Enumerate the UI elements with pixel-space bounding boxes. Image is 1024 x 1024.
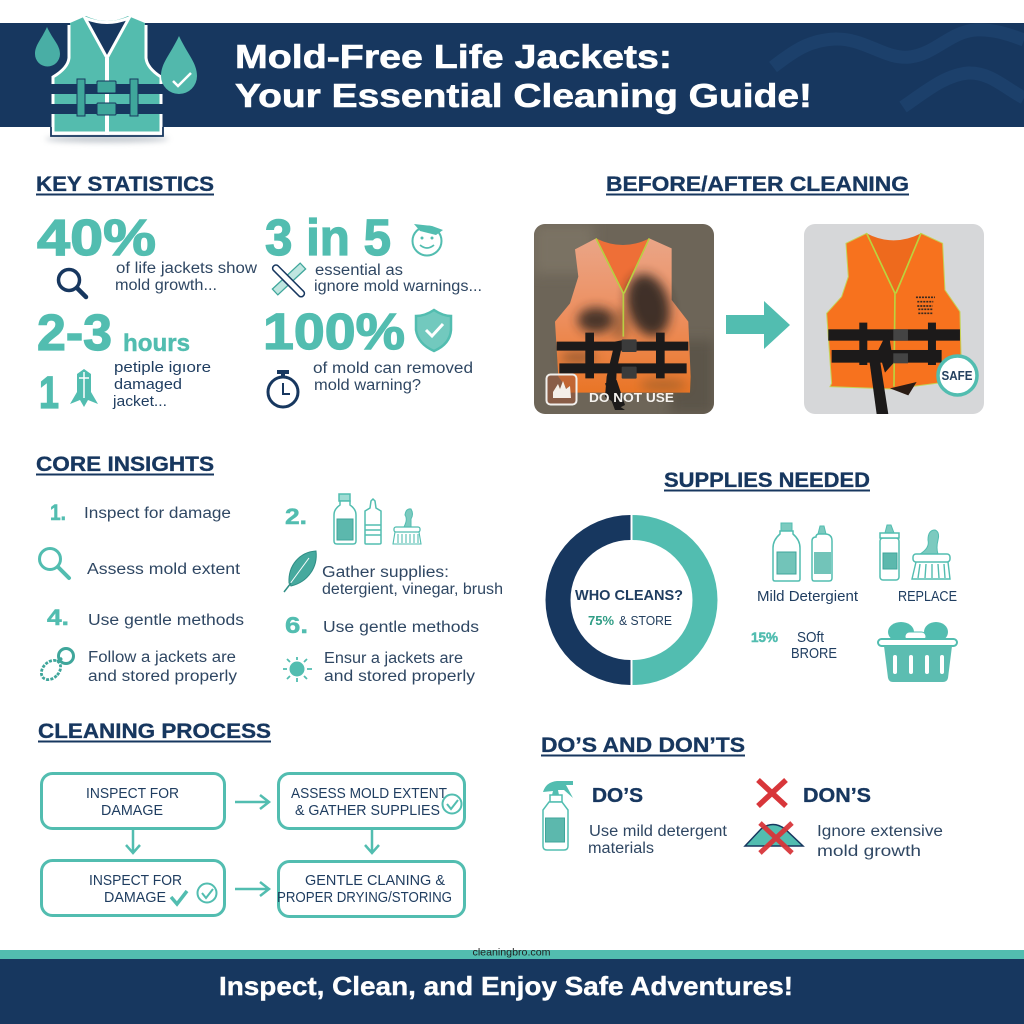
process step: inspect for damage — [42, 774, 224, 828]
label: 15 percent soft: 15% — [751, 629, 779, 645]
icon: laundry basket — [878, 622, 957, 682]
insight: follow: Follow a jackets are — [88, 649, 236, 666]
insight 4: Use gentle methods — [88, 612, 244, 629]
stat: 2-3 hours: damaged — [114, 377, 182, 393]
arrow: step 1 down — [126, 829, 140, 853]
photo: clean life jacket — [804, 224, 984, 414]
process step: assess and gather: & GATHER SUPPLIES — [295, 803, 440, 819]
process step: gentle cleaning: PROPER DRYING/STORING — [277, 890, 452, 906]
don'ts column: mold growth — [817, 843, 921, 860]
label: 15 percent soft: BRORE — [791, 646, 837, 662]
stat: 2-3 hours: 1 — [39, 367, 59, 418]
icons and label: mild detergent: Mild Detergient — [757, 589, 858, 605]
label: 15 percent soft — [751, 629, 837, 662]
source credit: cleaningbro.com — [472, 946, 551, 958]
do's column: materials — [588, 840, 654, 857]
insight 1 — [50, 500, 231, 525]
icons and label: replace — [880, 525, 957, 605]
insight: ensure: Ensur a jackets are — [324, 650, 463, 667]
badge: do not use — [546, 374, 674, 405]
process step: inspect for damage again: DAMAGE — [104, 890, 166, 906]
icons and label: mild detergent — [757, 523, 858, 605]
header banner — [0, 23, 1024, 127]
stat: 40 percent — [37, 209, 258, 297]
badge: do not use: DO NOT USE — [589, 390, 674, 405]
insight 6: 6. — [285, 612, 308, 638]
title: Mold-Free Life Jackets: — [235, 38, 672, 75]
heading: core insights: CORE INSIGHTS — [36, 453, 214, 476]
donut chart: who cleans — [546, 515, 718, 685]
donut chart: who cleans: 75% — [588, 613, 614, 628]
insight: assess mold — [40, 548, 241, 578]
stat: 100 percent: 100% — [263, 303, 405, 360]
process step: inspect for damage: INSPECT FOR — [86, 786, 179, 802]
don'ts column: DON’S — [803, 785, 871, 807]
arrow: step 2 down — [365, 829, 379, 853]
insight: gather supplies: Gather supplies: — [322, 564, 449, 581]
insight 4 — [47, 605, 244, 630]
insight 6: Use gentle methods — [323, 619, 479, 636]
arrow: step 1 to 2 — [235, 795, 269, 809]
insight: assess mold: Assess mold extent — [87, 561, 241, 578]
heading: do's and don'ts: DO’S AND DON’TS — [541, 734, 745, 757]
icons and label: replace: REPLACE — [898, 589, 957, 605]
process step: inspect for damage again: INSPECT FOR — [89, 873, 182, 889]
badge: safe — [938, 356, 977, 395]
label: 15 percent soft: SOft — [797, 630, 824, 646]
donut chart: who cleans: WHO CLEANS? — [575, 587, 683, 604]
process step: assess and gather — [278, 774, 464, 828]
insight: follow: and stored properly — [88, 668, 237, 685]
stat: 3 in 5: ignore mold warnings... — [314, 278, 482, 295]
stat: 40 percent: of life jackets show — [116, 260, 258, 277]
photo: moldy life jacket — [534, 224, 714, 414]
badge: safe: SAFE — [942, 369, 972, 383]
insight: gather supplies — [284, 551, 503, 598]
icon: life jacket — [45, 16, 169, 142]
insight: gather supplies: detergient, vinegar, brush — [322, 581, 503, 598]
process step: gentle cleaning — [277, 862, 464, 916]
do's column — [543, 781, 728, 857]
do's column: Use mild detergent — [589, 823, 728, 840]
insight: ensure — [283, 650, 475, 685]
insight 2 with supply icons: 2. — [285, 504, 307, 529]
title: Your Essential Cleaning Guide! — [235, 77, 812, 114]
icon: water drop with check — [161, 36, 197, 94]
don'ts column: Ignore extensive — [817, 823, 943, 840]
insight: follow — [38, 648, 237, 685]
heading: before/after cleaning: BEFORE/AFTER CLEANING — [606, 173, 909, 196]
stat: 2-3 hours: petiple igıore — [114, 360, 211, 376]
insight 6 — [285, 612, 479, 638]
do's column: DO’S — [592, 785, 643, 807]
insight 1: Inspect for damage — [84, 505, 231, 522]
stat: 2-3 hours: jacket... — [112, 394, 167, 410]
stat: 2-3 hours: hours — [123, 330, 190, 357]
stat: 100 percent: mold warning? — [314, 377, 421, 394]
stat: 2-3 hours — [37, 304, 211, 418]
process step: inspect for damage: DAMAGE — [101, 803, 163, 819]
process step: assess and gather: ASSESS MOLD EXTENT — [291, 786, 447, 802]
arrow: before to after — [726, 301, 790, 349]
stat: 100 percent — [263, 303, 473, 407]
stat: 40 percent: 40% — [37, 209, 156, 266]
stat: 3 in 5: essential as — [315, 262, 403, 279]
stat: 2-3 hours: 2-3 — [37, 304, 112, 361]
arrow: step 3 to 4 — [235, 882, 269, 896]
icon: small water drop — [35, 27, 60, 66]
footer banner — [0, 950, 1024, 1024]
title — [235, 38, 812, 114]
don'ts column — [745, 780, 943, 860]
footer banner: Inspect, Clean, and Enjoy Safe Adventures! — [219, 971, 793, 1001]
process step: gentle cleaning: GENTLE CLANING & — [305, 873, 445, 889]
insight 1: 1. — [50, 500, 66, 525]
insight 4: 4. — [47, 605, 69, 630]
insight: ensure: and stored properly — [324, 668, 475, 685]
stat: 40 percent: mold growth... — [115, 277, 217, 294]
insight 2 with supply icons — [285, 494, 421, 544]
stat: 3 in 5 — [265, 209, 482, 298]
stat: 100 percent: of mold can removed — [313, 360, 473, 377]
heading: cleaning process: CLEANING PROCESS — [38, 720, 271, 743]
donut chart: who cleans: & STORE — [619, 613, 672, 628]
stat: 3 in 5: 3 in 5 — [265, 209, 391, 266]
process step: inspect for damage again — [42, 860, 224, 916]
heading: key statistics: KEY STATISTICS — [36, 173, 214, 196]
heading: supplies needed: SUPPLIES NEEDED — [664, 469, 870, 492]
